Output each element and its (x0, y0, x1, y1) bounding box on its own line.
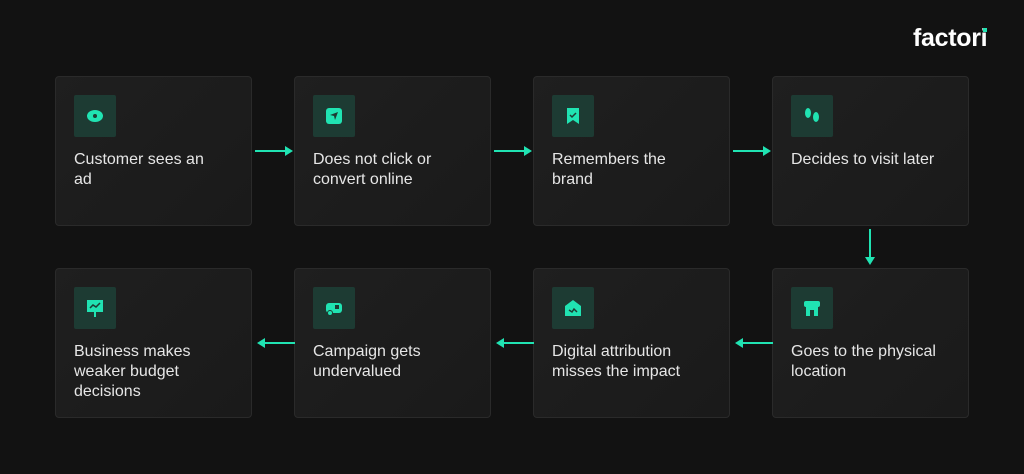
arrow left 3 (257, 338, 295, 348)
card: Customer sees an ad: Customer sees an ad (74, 151, 204, 188)
arrow left 1 (735, 338, 773, 348)
card: Remembers the brand: Remembers the brand (552, 151, 666, 188)
logo: factori (913, 24, 987, 52)
card: Decides to visit later: Decides to visit later (791, 151, 934, 168)
arrow left 2 (496, 338, 534, 348)
card: Digital attribution misses (533, 268, 730, 418)
card: Remembers the brand (533, 76, 730, 226)
card: Goes to physical location (772, 268, 969, 418)
card: Business weaker decisions (55, 268, 252, 418)
card: Decides to visit later (772, 76, 969, 226)
card: Campaign undervalued (294, 268, 491, 418)
card: Does not click (294, 76, 491, 226)
card: Goes to physical location: Goes to the physical location (791, 343, 936, 380)
card: Digital attribution misses: Digital attribution misses the impact (552, 343, 680, 380)
card: Does not click: Does not click or convert online (313, 151, 431, 188)
arrow 3 (733, 146, 771, 156)
card: Business weaker decisions: Business makes weaker budget decisions (74, 343, 190, 400)
arrow 2 (494, 146, 532, 156)
card: Campaign undervalued: Campaign gets undervalued (313, 343, 421, 380)
arrow 1 (255, 146, 293, 156)
card: Customer sees an ad (55, 76, 252, 226)
arrow down (865, 229, 875, 265)
